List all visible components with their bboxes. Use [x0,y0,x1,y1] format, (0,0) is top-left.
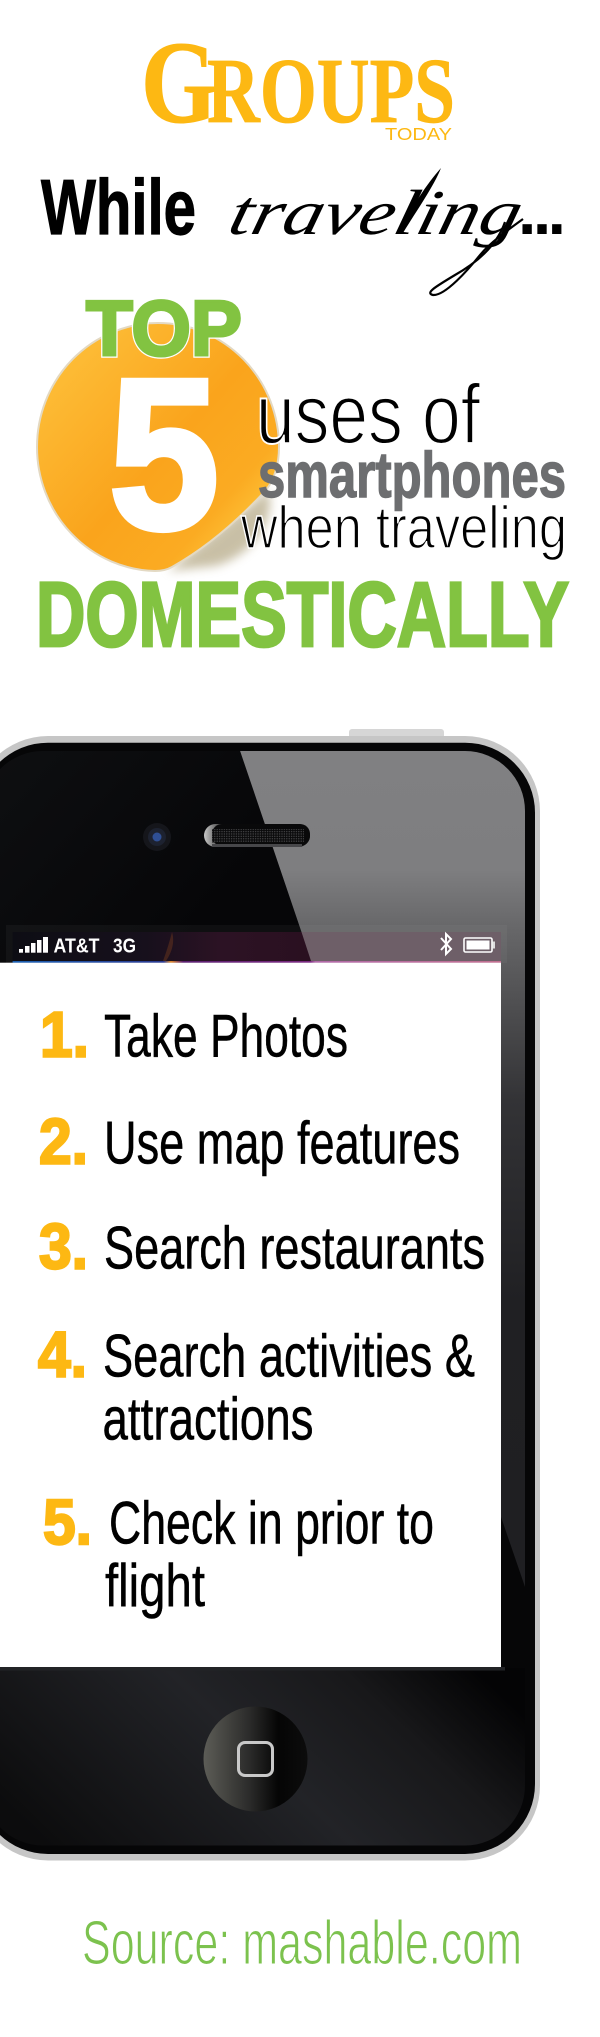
status bar [6,925,507,963]
heading: While traveling: traveling [222,178,530,249]
list item 4: 4. [38,1319,87,1391]
list item 4 [38,1319,475,1452]
top button [349,729,444,741]
logo: Groups Today: TODAY [385,124,452,144]
list item 4: Search activities & [103,1323,475,1390]
heading: TOP: TOP [86,284,242,372]
list item 1: Take Photos [104,1003,348,1070]
sticker badge with number 5 [37,323,279,574]
smartphone [0,729,540,1860]
logo: Groups Today: G [141,17,217,148]
screen frame bottom [0,1667,505,1670]
heading: uses of smartphones when traveling [240,367,567,561]
icon: battery [464,938,495,952]
list item 2: Use map features [104,1109,460,1176]
list item 4: attractions [102,1385,314,1452]
black bezel [0,743,535,1854]
heading: uses of smartphones when traveling: uses of [256,367,481,461]
glass face [0,751,525,1846]
list item 5 [43,1486,434,1619]
list item 1: 1. [40,999,89,1071]
heading: While traveling: While [41,163,196,251]
speaker [204,824,310,847]
carrier label: AT&T [54,936,100,958]
home button [204,1706,308,1812]
list item 2 [39,1105,460,1177]
glass reflection [240,751,525,1278]
heading: While traveling: ... [518,174,566,248]
network label: 3G [113,936,136,958]
list item 5: 5. [43,1486,92,1558]
signal bars [19,937,48,953]
list item 3: 3. [39,1210,88,1282]
white screen [0,963,501,1667]
icon: bluetooth [441,934,451,954]
silver case [0,736,540,1860]
list item 3 [39,1210,485,1282]
list item 3: Search restaurants [104,1214,485,1281]
sticker badge with number 5: 5 [109,335,219,574]
logo: Groups Today: ROUPS [207,40,455,143]
logo: Groups Today [141,17,455,148]
list item 5: Check in prior to [109,1489,434,1556]
list item 2: 2. [39,1105,88,1177]
front camera [143,823,171,851]
heading: While traveling [41,163,566,295]
heading: TOP: TOP [86,284,242,372]
list item 1 [40,999,348,1071]
list item 5: flight [105,1552,205,1619]
